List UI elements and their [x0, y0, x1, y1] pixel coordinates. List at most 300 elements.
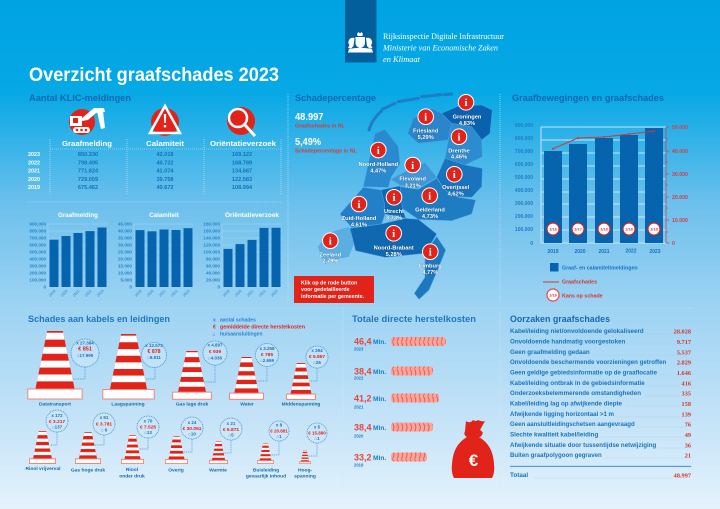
logo text: Ministerie van Economische Zaken	[382, 42, 498, 52]
chart: Graafmelding: 800.000	[29, 228, 46, 234]
marker: Noord-Holland	[359, 142, 399, 175]
chart: Oriëntatieverzoek: 40.000	[206, 270, 220, 276]
list: oorzaken: Onderzoeksbelemmerende omstandigheden	[510, 390, 641, 397]
row: 2023	[354, 336, 446, 352]
chart: Oriëntatieverzoek: 2020	[234, 289, 243, 298]
panel: Aantal KLIC-meldingen	[28, 93, 282, 298]
chart: Calamiteit	[118, 212, 194, 298]
list: oorzaken: Geen aansluitleidingschetsen aangevraagd	[510, 421, 635, 428]
legend	[212, 318, 305, 338]
callout: rode button: informatie per gemeente.	[301, 294, 365, 300]
chart: Graafmelding: 2020	[60, 289, 69, 298]
chart: Graafmelding: 400.000	[29, 256, 46, 262]
marker: Flevoland: Flevoland	[399, 177, 426, 183]
combo chart: 1/18	[625, 228, 633, 232]
chart: Oriëntatieverzoek: 0	[217, 284, 220, 290]
combo chart: 20.000	[672, 195, 688, 201]
marker: Zeeland: Zeeland	[320, 252, 342, 258]
row: 2019	[354, 452, 427, 468]
chart: Oriëntatieverzoek: 20.000	[206, 278, 220, 282]
combo chart: 600.000	[515, 162, 533, 168]
chart: Graafmelding: 2021	[72, 289, 81, 298]
row: 2021	[354, 394, 439, 410]
list: oorzaken	[510, 328, 691, 460]
cone: Water: x 3.258	[259, 346, 275, 351]
cone: Datatransport: € 851	[78, 346, 92, 352]
cone: Riool onder druk	[119, 416, 159, 480]
legend: Graaf- en calamiteitmeldingen	[562, 266, 638, 272]
icon: money bag: €	[469, 451, 479, 470]
list: oorzaken: Geen graafmelding gedaan	[510, 349, 590, 356]
cone: Hoogspanning	[294, 423, 327, 480]
row: 2022: Mln.	[373, 369, 386, 376]
cone: Gas lage druk: Gas lage druk	[176, 402, 208, 408]
stat: schadepercentage: Schadepercentage in NL	[295, 148, 358, 154]
stat: schadepercentage	[295, 137, 358, 154]
marker: Utrecht	[384, 190, 404, 222]
cone: Warmte: Warmte	[209, 468, 227, 474]
cone: Datatransport: ⌂17.995	[77, 353, 94, 358]
cone: Laagspanning: Laagspanning	[111, 402, 145, 408]
combo chart: 200.000	[515, 214, 533, 220]
cone: Middenspanning: Middenspanning	[282, 402, 320, 408]
chart: Graafmelding: 2019	[48, 289, 57, 298]
callout: rode button: voor gedetailleerde	[301, 287, 350, 293]
chart: Oriëntatieverzoek	[203, 212, 282, 298]
cone: Datatransport	[27, 331, 99, 408]
cone: Riool vrijverval: ⌂137	[52, 424, 63, 430]
chart: Graafmelding: 100.000	[29, 278, 46, 282]
row: 2022	[354, 366, 433, 380]
total	[510, 472, 691, 480]
chart: Calamiteit: 10.000	[118, 270, 132, 276]
list: oorzaken: 139	[682, 412, 691, 418]
legend	[543, 263, 638, 301]
legend: huisaansluitingen	[220, 332, 263, 338]
stat: schadepercentage: 5,49%	[295, 137, 321, 148]
combo chart	[515, 123, 688, 255]
icon: excavator	[69, 108, 105, 135]
list: oorzaken: Geen geldige gebiedsinformatie op de graaflocatie	[510, 369, 657, 376]
cone: Water: ⌂2.659	[260, 358, 274, 363]
marker: Limburg: Limburg	[419, 264, 442, 270]
cone: Warmte: ⌂5	[228, 432, 234, 438]
table: meldingen: 850.330	[78, 152, 98, 158]
cone: Hoogspanning: € 15.880	[308, 430, 326, 436]
combo chart: 2020	[574, 249, 586, 255]
marker: Zeeland: 2,79%	[322, 259, 338, 265]
icon: money bag	[452, 420, 494, 478]
panel: Oorzaken graafschades	[510, 314, 691, 480]
list: oorzaken: Kabel/leiding ontbrak in de gebiedsinformatie	[510, 380, 645, 387]
list: oorzaken: Slechte kwaliteit kabel/leiding	[510, 431, 598, 438]
marker: Groningen: Groningen	[453, 114, 482, 120]
cone: Riool onder druk: ⌂13	[144, 430, 152, 435]
marker: Flevoland: i	[411, 160, 414, 172]
marker: Noord-Brabant	[374, 226, 414, 258]
combo chart: 1/18	[650, 228, 658, 232]
marker: Noord-Brabant: i	[392, 228, 395, 240]
table: meldingen	[28, 139, 277, 191]
chart: Oriëntatieverzoek: 2019	[222, 289, 231, 298]
table: meldingen: 41.074	[156, 168, 174, 174]
heading: Oorzaken graafschades	[510, 314, 610, 325]
row: 2020	[354, 422, 433, 438]
heading: Schadepercentage	[295, 93, 376, 104]
marker: Zuid-Holland	[342, 196, 377, 228]
chart: Calamiteit: 45.000	[118, 222, 132, 226]
cone: Buisleiding gevaarlijk inhoud: ⌂1	[276, 434, 282, 439]
logo: Rijksoverheid	[345, 0, 504, 64]
row: 2021: 41,2	[354, 394, 372, 404]
chart: Calamiteit: 25.000	[118, 250, 132, 254]
cone: Warmte: € 6.871	[223, 427, 239, 433]
cone: Overig: Overig	[168, 468, 184, 474]
marker: Drenthe: i	[457, 132, 461, 144]
cone: Riool vrijverval: x 172	[51, 413, 63, 418]
table: meldingen: 122.583	[232, 177, 252, 183]
cone: Hoogspanning: x 5	[314, 424, 321, 430]
table: meldingen: 2021	[28, 168, 40, 174]
cone: Riool onder druk: onder druk	[119, 474, 145, 480]
stat: graafschades: 48.997	[295, 112, 324, 123]
map: Nederland	[318, 94, 492, 299]
marker: Noord-Brabant: 5,28%	[386, 252, 402, 258]
marker: Gelderland	[415, 188, 445, 220]
chart: Calamiteit: 15.000	[118, 264, 132, 268]
list: oorzaken: 36	[685, 442, 691, 449]
cone: Gas lage druk	[172, 341, 227, 408]
marker: Groningen: 4,83%	[459, 121, 475, 127]
chart: Calamiteit: Calamiteit	[149, 212, 179, 219]
marker: Zuid-Holland: i	[357, 199, 361, 211]
chart: Calamiteit: 2022	[170, 289, 179, 298]
total: 48.997	[674, 472, 691, 480]
panel: Schades aan kabels en leidingen	[25, 314, 328, 480]
marker: Limburg: i	[429, 246, 432, 258]
combo chart: 2022	[625, 248, 637, 254]
marker: Flevoland: 3,21%	[405, 183, 421, 189]
chart: Oriëntatieverzoek: 80.000	[206, 256, 220, 262]
list: oorzaken: Buiten graafpolygoon gegraven	[510, 452, 602, 459]
total: Totaal	[510, 472, 528, 479]
cone: Datatransport: x 27.384	[76, 340, 94, 346]
chart: Calamiteit: 20.000	[118, 256, 132, 262]
chart: Graafmelding: 300.000	[29, 264, 46, 268]
marker: Gelderland: Gelderland	[415, 208, 445, 214]
combo chart: 1/17	[574, 228, 582, 232]
cone: Gas hoge druk	[71, 413, 115, 474]
table: meldingen: 40.672	[156, 185, 174, 191]
combo chart: 100.000	[515, 227, 533, 233]
cone: Water	[229, 344, 278, 408]
list: oorzaken: 2.829	[677, 360, 691, 366]
table: meldingen: 169.122	[232, 152, 252, 158]
row: 2023: 2023	[354, 346, 364, 352]
table: meldingen: 2023	[28, 152, 40, 158]
table: meldingen: 42.018	[156, 152, 174, 158]
chart: Graafmelding: 200.000	[29, 270, 46, 276]
combo chart: 2021	[598, 249, 610, 255]
list: oorzaken: 416	[682, 380, 691, 387]
cone: Buisleiding gevaarlijk inhoud	[246, 421, 289, 480]
chart: Graafmelding: 500.000	[29, 250, 46, 254]
marker: Friesland: Friesland	[413, 128, 439, 134]
cone: Gas hoge druk: Gas hoge druk	[71, 468, 105, 474]
table: meldingen: 2022	[28, 160, 40, 166]
marker: Groningen	[453, 94, 482, 127]
marker: Friesland	[413, 109, 439, 141]
icon: magnifier	[227, 107, 255, 136]
table: meldingen: 168.789	[232, 160, 252, 166]
chart: Graafmelding: Graafmelding	[58, 212, 98, 219]
chart: Oriëntatieverzoek: 160.000	[203, 228, 220, 234]
heading: Totale directe herstelkosten	[352, 314, 476, 325]
list: oorzaken: Afwijkende situatie door tussentijdse netwijziging	[510, 442, 656, 449]
cone: Warmte: x 21	[227, 421, 236, 426]
panel: Schadepercentage	[294, 93, 492, 303]
cone: Riool vrijverval: Riool vrijverval	[25, 466, 61, 472]
legend: €	[213, 324, 216, 330]
row: 2022: 38,4	[354, 366, 372, 376]
chart: Graafmelding: 900.000	[29, 222, 46, 226]
row: 2021: 2021	[354, 404, 364, 410]
callout: rode button: Klik op de rode button	[301, 280, 357, 286]
chart: Graafmelding: 600.000	[29, 242, 46, 248]
row: 2020: Mln.	[373, 425, 386, 432]
marker: Utrecht: Utrecht	[384, 209, 404, 215]
marker: Gelderland: 4,73%	[422, 214, 438, 220]
combo chart: 0	[530, 241, 533, 247]
row: 2020: 38,4	[354, 422, 372, 432]
cone: Laagspanning: € 878	[148, 349, 161, 355]
cone: Gas lage druk: x 4.897	[207, 342, 223, 348]
panel: Totale directe herstelkosten	[352, 314, 494, 478]
chart: Calamiteit: 2023	[182, 289, 191, 298]
heading: Schades aan kabels en leidingen	[28, 314, 170, 325]
combo chart: 2023	[649, 249, 661, 255]
marker: Overijssel: Overijssel	[442, 185, 470, 191]
marker: Zuid-Holland: 4,61%	[351, 222, 367, 228]
row: 2021: Mln.	[373, 396, 386, 403]
cone: Gas lage druk: € 939	[209, 349, 221, 355]
cone: Riool vrijverval: € 3.217	[49, 419, 65, 425]
list: oorzaken: Onvoldoende beschermende voorzieningen getroffen	[510, 359, 666, 366]
combo chart: 50.000	[672, 125, 688, 131]
combo chart: 40.000	[672, 149, 688, 155]
legend: Graafschades	[562, 280, 597, 286]
cone: Laagspanning: x 12.573	[145, 343, 163, 348]
cone: Hoogspanning: Hoog-	[298, 468, 312, 474]
table: meldingen: Oriëntatieverzoek	[210, 139, 277, 148]
logo text	[382, 31, 504, 64]
table: meldingen: Graafmelding	[62, 139, 112, 148]
chart: Graafmelding	[29, 212, 108, 298]
list: oorzaken: Kabel/leiding niet/onvoldoende gelokaliseerd	[510, 328, 644, 335]
marker: Utrecht: 3,73%	[386, 216, 402, 222]
stat: graafschades: Graafschades in NL	[295, 124, 346, 130]
stat: graafschades	[295, 112, 346, 130]
chart: Oriëntatieverzoek: 2021	[246, 289, 255, 298]
row: 2019: Mln.	[373, 455, 386, 462]
marker: Limburg	[419, 244, 442, 276]
chart: Calamiteit: 2019	[134, 289, 143, 298]
cone: Overig: € 30.051	[182, 426, 202, 432]
list: oorzaken: 21	[685, 452, 691, 460]
chart: Graafmelding: 2023	[96, 289, 105, 298]
cone: Riool onder druk: x 70	[144, 418, 153, 424]
marker: Noord-Holland: i	[377, 145, 380, 157]
legend: aantal schades	[220, 318, 256, 324]
heading: Graafbewegingen en graafschades	[512, 93, 664, 104]
chart: Oriëntatieverzoek: Oriëntatieverzoek	[225, 212, 280, 219]
row: 2023: Mln.	[373, 339, 386, 346]
chart: Calamiteit: 0	[129, 284, 132, 290]
cone: Water: € 785	[261, 352, 273, 358]
combo chart: 500.000	[515, 175, 533, 181]
chart: Oriëntatieverzoek: 2022	[258, 289, 267, 298]
chart: Calamiteit: 2020	[146, 289, 155, 298]
cone: Buisleiding gevaarlijk inhoud: gevaarlijk inhoud	[246, 474, 286, 480]
cone: Hoogspanning: ⌂1	[314, 436, 320, 441]
chart: Calamiteit: 40.000	[118, 228, 132, 234]
legend: 1/18	[549, 294, 557, 298]
cone: Middenspanning: ⌂26	[313, 360, 321, 365]
combo chart: 2019	[547, 249, 559, 255]
marker: Noord-Brabant: Noord-Brabant	[374, 246, 414, 252]
table: meldingen: 2019	[28, 185, 40, 191]
list: oorzaken: 1.646	[677, 370, 691, 377]
legend: gemiddelde directe herstelkosten	[220, 324, 305, 330]
cone: Riool onder druk: € 7.525	[140, 424, 156, 430]
panel: Graafbewegingen en graafschades	[512, 93, 688, 301]
cone: Overig: x 24	[188, 420, 197, 425]
row: 2019: 2019	[354, 462, 364, 468]
list: oorzaken: Kabel/leiding lag op afwijkende diepte	[510, 400, 622, 407]
cone: Riool onder druk: Riool	[126, 467, 139, 473]
marker: Zuid-Holland: Zuid-Holland	[342, 216, 377, 222]
chart: Oriëntatieverzoek: 180.000	[203, 222, 220, 226]
combo chart: 1/18	[600, 228, 608, 232]
cone: Laagspanning	[102, 334, 166, 408]
chart: Calamiteit: 2021	[158, 289, 167, 298]
list: oorzaken: 76	[685, 422, 691, 428]
callout: rode button	[294, 276, 374, 303]
heading: Aantal KLIC-meldingen	[29, 93, 131, 104]
cone: Hoogspanning: spanning	[294, 474, 316, 480]
marker: Flevoland	[399, 157, 426, 189]
chart: Oriëntatieverzoek: 120.000	[203, 242, 220, 248]
list: oorzaken: 28.028	[674, 328, 691, 336]
marker: Gelderland: i	[428, 190, 431, 202]
marker: Drenthe	[448, 129, 470, 161]
cone: Gas hoge druk: x 91	[100, 415, 109, 420]
table: meldingen: 39.758	[156, 177, 174, 183]
table: meldingen: Calamiteit	[146, 139, 185, 148]
combo chart: 0	[672, 241, 675, 247]
table: meldingen: 675.462	[78, 185, 98, 191]
chart: Oriëntatieverzoek: 140.000	[203, 236, 220, 240]
combo chart: 10.000	[672, 218, 688, 224]
cone: Gas lage druk: ⌂4.036	[208, 356, 222, 360]
combo chart: 30.000	[672, 172, 688, 178]
chart: Calamiteit: 35.000	[118, 236, 132, 240]
list: oorzaken: 335	[682, 390, 691, 398]
cone: Gas hoge druk: € 3.781	[96, 422, 112, 428]
table: meldingen: 771.824	[78, 168, 99, 174]
list: oorzaken: 9.717	[677, 339, 691, 346]
cone: Warmte	[209, 418, 242, 474]
logo text: Rijksinspectie Digitale Infrastructuur	[383, 31, 504, 41]
cone: Laagspanning: ⌂6.911	[147, 355, 161, 360]
cone: Datatransport: Datatransport	[39, 402, 71, 408]
row: 2023: 46,4	[354, 336, 372, 346]
combo chart: 700.000	[515, 149, 533, 155]
table: meldingen: 798.495	[78, 160, 98, 166]
marker: Noord-Holland: Noord-Holland	[359, 162, 399, 168]
combo chart: 300.000	[515, 201, 533, 207]
table: meldingen: 108.994	[232, 185, 253, 191]
list: oorzaken: 49	[685, 432, 691, 439]
list: oorzaken: Onvoldoende handmatig voorgestoken	[510, 338, 625, 345]
icon: crest	[348, 32, 373, 52]
row: 2022: 2022	[354, 376, 364, 380]
combo chart: 800.000	[515, 136, 533, 142]
chart: Graafmelding: 0	[43, 284, 46, 290]
marker: Noord-Holland: 4,47%	[370, 169, 386, 175]
marker: Friesland: 5,29%	[418, 135, 434, 141]
legend: ⌂	[212, 332, 216, 338]
combo chart: 400.000	[515, 188, 533, 194]
marker: Utrecht: i	[392, 192, 396, 204]
chart: Graafmelding: 2022	[84, 289, 93, 298]
table: meldingen: 2020	[28, 177, 40, 183]
legend: Kans op schade	[562, 294, 603, 300]
chart: Oriëntatieverzoek: 100.000	[203, 250, 220, 254]
legend: x	[213, 318, 216, 324]
marker: Zeeland: i	[329, 236, 332, 248]
list: oorzaken: 5.537	[677, 350, 691, 356]
table: meldingen: 729.059	[78, 177, 98, 183]
chart: Calamiteit: 5.000	[120, 278, 132, 282]
marker: Overijssel: i	[453, 169, 456, 181]
cone: Buisleiding gevaarlijk inhoud: x 8	[276, 422, 283, 428]
cone: Buisleiding gevaarlijk inhoud: € 20.881	[270, 428, 288, 434]
marker: Zeeland	[320, 233, 342, 265]
cone: Buisleiding gevaarlijk inhoud: Buisleiding	[253, 468, 279, 474]
row: 2020: 2020	[354, 434, 364, 438]
cone: Water: Water	[240, 402, 254, 408]
chart: Calamiteit: 30.000	[118, 242, 132, 248]
marker: Limburg: 4,77%	[422, 270, 438, 276]
chart: Oriëntatieverzoek: 60.000	[206, 264, 220, 268]
marker: Drenthe: 4,46%	[451, 155, 467, 161]
cone: Overig: ⌂10	[188, 432, 196, 436]
icon: warning	[150, 106, 180, 136]
list: oorzaken: Afwijkende ligging horizontaal >1 m	[510, 411, 614, 418]
combo chart: 900.000	[515, 123, 533, 129]
cone: Middenspanning: € 5.867	[309, 354, 325, 360]
cone: Riool vrijverval	[25, 410, 68, 472]
cone: Middenspanning: x 394	[311, 348, 323, 353]
marker: Drenthe: Drenthe	[448, 148, 470, 154]
marker: Friesland: i	[424, 112, 427, 124]
marker: Groningen: i	[464, 97, 468, 109]
table: meldingen: 40.722	[156, 160, 174, 166]
list: oorzaken: 158	[682, 401, 691, 408]
title: Overzicht graafschades 2023	[29, 65, 279, 86]
chart: Oriëntatieverzoek: 2023	[270, 289, 279, 298]
